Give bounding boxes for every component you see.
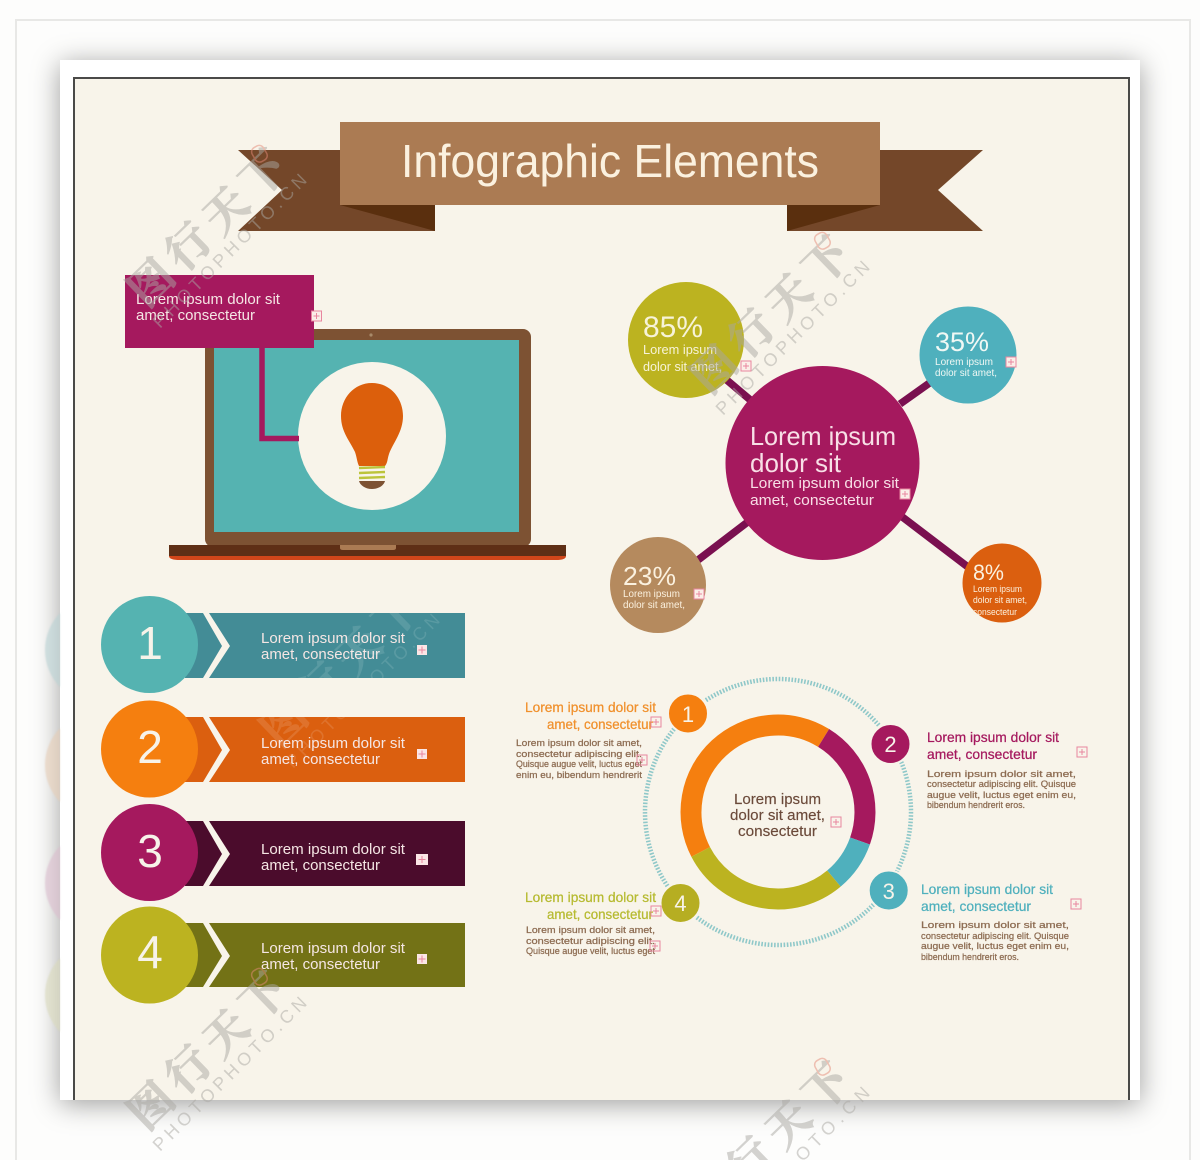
connector spokes — [698, 372, 985, 580]
watermark over list bars: PHOTOPHOTO.CN — [282, 610, 444, 772]
donut segment teal — [834, 841, 860, 879]
text block 1 — [516, 699, 661, 780]
list item 4: amet, consectetur — [261, 957, 380, 973]
list item 2: 2 — [137, 721, 163, 773]
text block 1: consectetur adipiscing elit. — [516, 749, 642, 759]
bubble 35% — [920, 306, 1016, 404]
text block 4: Lorem ipsum dolor sit amet, — [526, 925, 655, 935]
number badge 1 — [668, 694, 708, 734]
ribbon left fold — [340, 205, 435, 231]
number badge 2 — [870, 724, 910, 764]
text block 4: amet, consectetur — [547, 906, 653, 922]
number badge 4 — [660, 883, 700, 923]
number badge 2: 2 — [884, 732, 897, 757]
watermark top left: PHOTOPHOTO.CN — [149, 170, 311, 332]
donut segment olive — [701, 852, 834, 899]
text block 4: consectetur adipiscing elit. — [526, 936, 655, 946]
callout text: Lorem ipsum dolor sit — [136, 292, 280, 308]
number badge 1: 1 — [682, 702, 694, 727]
list item 4: 4 — [137, 926, 163, 978]
ribbon left tail — [238, 150, 435, 231]
numbered list — [101, 596, 465, 1004]
trackpad notch — [340, 545, 396, 550]
donut centre text: Lorem ipsum — [734, 791, 821, 808]
text block 1: Lorem ipsum dolor sit — [525, 699, 656, 715]
ghost reflection circles — [44, 614, 60, 1032]
number badge 3: 3 — [883, 879, 895, 904]
infographic artwork — [101, 122, 1088, 1160]
watermark top right: 图行天下 — [674, 220, 863, 405]
ribbon right tail — [787, 150, 983, 231]
donut centre text: consectetur — [738, 823, 817, 840]
donut centre text — [730, 791, 825, 840]
screen circle — [298, 362, 446, 510]
number badge 3 — [869, 870, 909, 910]
list item 4 — [101, 906, 465, 1004]
bubble diagram — [610, 282, 1042, 633]
watermark bottom left: 图行天下 — [111, 956, 300, 1141]
text block 3: consectetur adipiscing elit. Quisque — [921, 931, 1069, 941]
list item 2 — [101, 700, 465, 798]
beige inner panel — [73, 77, 1130, 1100]
watermark top left: 图行天下 — [111, 133, 300, 318]
bubble 23%: dolor sit amet, — [623, 599, 685, 611]
ribbon right fold — [787, 205, 880, 231]
callout box — [125, 275, 314, 348]
dashed outer ring — [645, 679, 911, 945]
watermark top right: PHOTOPHOTO.CN — [712, 257, 874, 419]
text block 3: Lorem ipsum dolor sit amet, — [921, 920, 1069, 930]
number badge 4: 4 — [674, 891, 687, 916]
text block 1: Quisque augue velit, luctus eget — [516, 759, 642, 769]
central bubble text: Lorem ipsum — [750, 421, 896, 451]
laptop illustration — [125, 275, 566, 560]
donut segment magenta — [824, 738, 865, 841]
list item 3: amet, consectetur — [261, 858, 380, 874]
text block 3: bibendum hendrerit eros. — [921, 952, 1019, 962]
ribbon main band — [340, 122, 880, 205]
connector line — [262, 348, 299, 438]
donut segment orange — [691, 725, 824, 852]
text block 3: Lorem ipsum dolor sit — [921, 881, 1053, 897]
list item 3: Lorem ipsum dolor sit — [261, 842, 405, 858]
list item 1: Lorem ipsum dolor sit — [261, 631, 405, 647]
list item 2: amet, consectetur — [261, 752, 380, 768]
bubble 8%: consectetur — [973, 607, 1017, 617]
bubble 8%: 8% — [973, 560, 1004, 585]
text block 4: Lorem ipsum dolor sit — [525, 889, 656, 905]
bubble 23% — [610, 537, 706, 633]
text block 1: Lorem ipsum dolor sit amet, — [516, 738, 642, 748]
bubble 23%: 23% — [623, 561, 676, 591]
laptop illustration: amet, consectetur — [136, 308, 255, 324]
list item 4: Lorem ipsum dolor sit — [261, 941, 405, 957]
central bubble text: dolor sit — [750, 448, 842, 478]
list item 3 — [101, 804, 465, 901]
text block 2: bibendum hendrerit eros. — [927, 800, 1025, 810]
bubble 85%: Lorem ipsum — [643, 343, 717, 357]
watermark bottom left: PHOTOPHOTO.CN — [149, 993, 311, 1155]
plus icon — [312, 311, 322, 321]
list item 2: Lorem ipsum dolor sit — [261, 736, 405, 752]
bubble 35%: 35% — [935, 327, 989, 357]
bubble 8%: Lorem ipsum — [973, 584, 1022, 594]
title: Infographic Elements — [401, 135, 819, 187]
text block 2 — [927, 729, 1087, 810]
plus icon — [900, 489, 910, 499]
title ribbon — [238, 122, 983, 231]
list item 3: 3 — [137, 825, 163, 877]
laptop screen — [214, 340, 519, 532]
icon: light bulb — [341, 383, 403, 489]
text block 2: Lorem ipsum dolor sit — [927, 729, 1059, 745]
central bubble text: amet, consectetur — [750, 492, 874, 509]
bubble 23%: Lorem ipsum — [623, 588, 680, 600]
text block 2: Lorem ipsum dolor sit amet, — [927, 769, 1076, 779]
text block 1: enim eu, bibendum hendrerit — [516, 770, 642, 780]
donut centre text: dolor sit amet, — [730, 807, 825, 824]
central bubble — [726, 366, 920, 560]
plus icon — [831, 817, 841, 827]
laptop base orange strip — [169, 552, 566, 560]
bubble 8% — [962, 544, 1042, 622]
central bubble text — [750, 421, 900, 509]
bubble 35%: Lorem ipsum — [935, 356, 993, 368]
text block 3 — [921, 881, 1081, 962]
text block 2: amet, consectetur — [927, 746, 1037, 762]
text block 2: augue velit, luctus eget enim eu, — [927, 790, 1076, 800]
bubble 85%: dolor sit amet, — [643, 360, 722, 374]
central bubble text: Lorem ipsum dolor sit — [750, 475, 900, 492]
text block 3: augue velit, luctus eget enim eu, — [921, 941, 1069, 951]
text block 2: consectetur adipiscing elit. Quisque — [927, 779, 1076, 789]
bubble 85% — [628, 282, 751, 398]
laptop lid — [205, 329, 531, 547]
watermark over list bars: 图行天下 — [244, 573, 433, 758]
bubble 85%: 85% — [643, 311, 703, 344]
camera dot — [369, 333, 373, 337]
text block 1: amet, consectetur — [547, 716, 653, 732]
list item 1: amet, consectetur — [261, 647, 380, 663]
list item 1: 1 — [137, 617, 163, 669]
text block 4 — [525, 889, 661, 956]
bubble 8%: dolor sit amet, — [973, 595, 1027, 605]
donut chart — [645, 679, 911, 945]
text block 4: Quisque augue velit, luctus eget — [526, 946, 655, 956]
list item 1 — [101, 596, 465, 693]
text block 3: amet, consectetur — [921, 898, 1031, 914]
laptop base — [169, 545, 566, 556]
bubble 35%: dolor sit amet, — [935, 367, 997, 379]
